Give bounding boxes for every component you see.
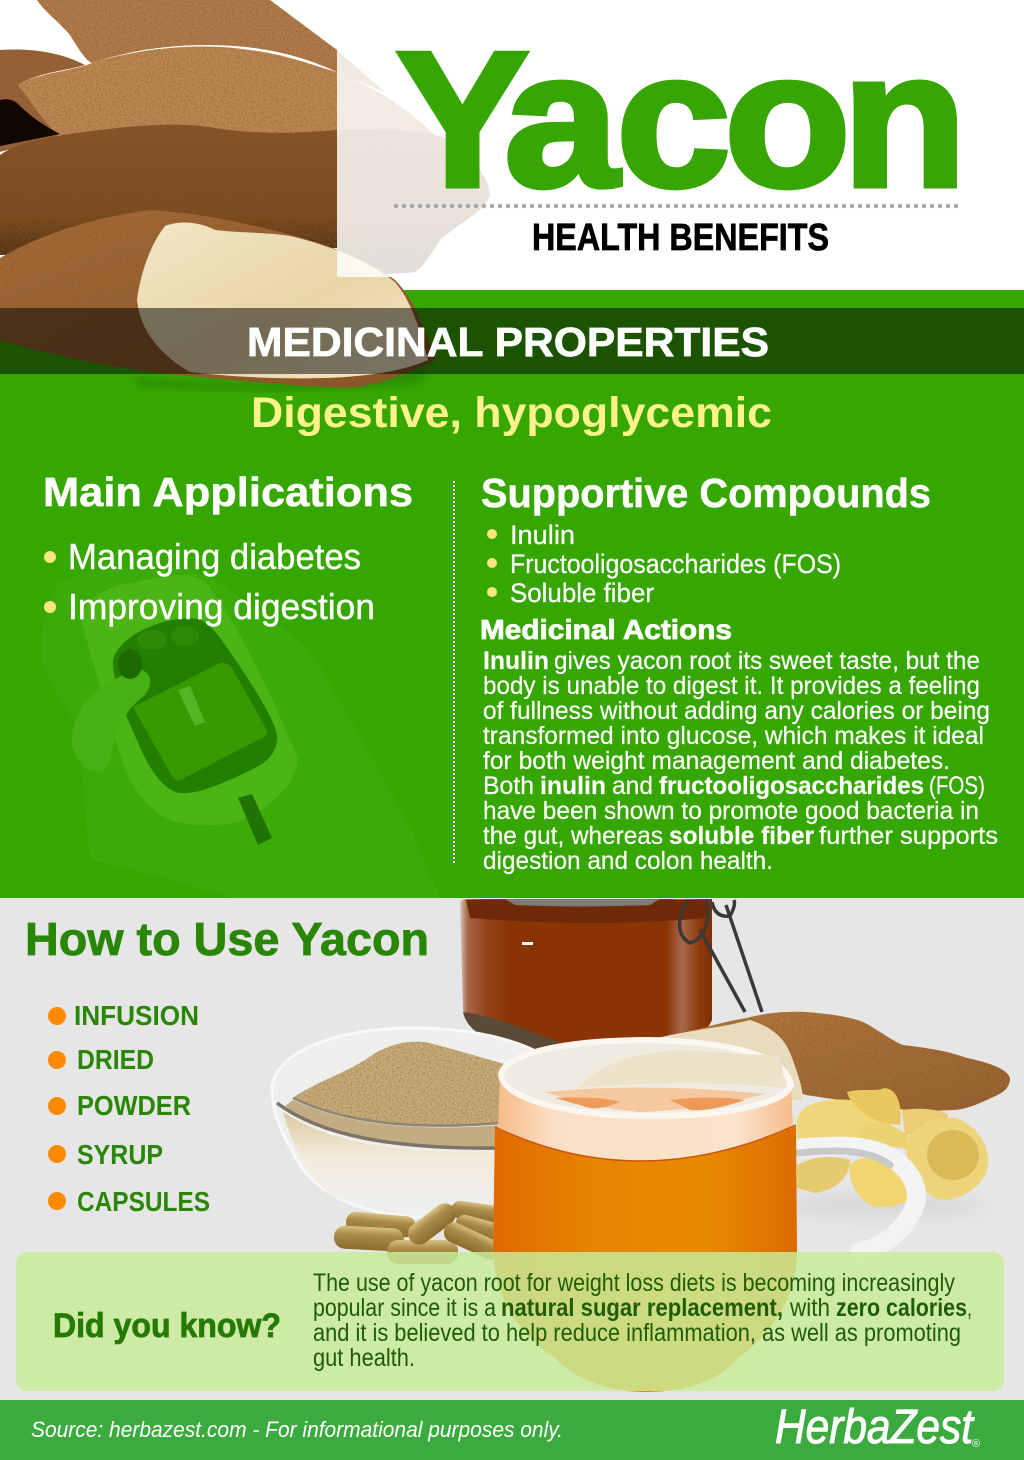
list item: improving digestion: Improving digestion	[68, 586, 375, 627]
list item: fructooligosaccharides: Fructooligosaccharides (FOS)	[510, 549, 841, 579]
panel: main applications	[43, 469, 413, 627]
text block: did you know body: ,	[967, 1294, 972, 1322]
white strip beside root above green band	[400, 277, 1024, 290]
text block: did you know body: gut health.	[313, 1344, 415, 1372]
text block: did you know body: with	[789, 1294, 830, 1322]
panel: supportive compounds	[480, 470, 998, 875]
logo: HerbaZest: HerbaZest	[775, 1401, 974, 1454]
list item: dried: DRIED	[77, 1044, 154, 1075]
subtitle: health benefits: HEALTH BENEFITS	[532, 217, 829, 259]
callout: did you know box	[16, 1252, 1004, 1391]
white translucent title panel	[337, 0, 1024, 277]
text block: medicinal actions body: have been shown to promote good bacteria in	[483, 797, 979, 825]
surface line	[495, 1125, 796, 1161]
source note: Source: herbazest.com - For informational purposes only.	[31, 1417, 563, 1442]
text block: medicinal actions body: transformed into glucose, which makes it ideal	[483, 722, 984, 750]
photo: yacon roots in header	[0, 0, 490, 391]
text block: medicinal actions body: Inulin	[483, 647, 549, 675]
heading: medicinal actions: Medicinal Actions	[480, 614, 732, 645]
list: ways to use yacon	[48, 1000, 210, 1217]
dotted column divider	[453, 482, 455, 865]
text block: did you know body: popular since it is a	[313, 1294, 496, 1322]
heading: supportive compounds: Supportive Compounds	[481, 470, 931, 516]
list item: capsules: CAPSULES	[77, 1186, 210, 1217]
cup body	[493, 1075, 797, 1392]
heading: did you know: Did you know?	[53, 1307, 281, 1345]
list item: soluble fiber: Soluble fiber	[510, 578, 654, 608]
title: Yacon: o	[724, 11, 851, 227]
photo: glass bowl of yacon powder	[272, 1028, 572, 1217]
title: Yacon: Y	[396, 11, 529, 227]
list item: syrup	[48, 1139, 163, 1170]
text block: medicinal actions body: fructooligosaccharides	[659, 772, 924, 800]
list item: powder: POWDER	[77, 1090, 191, 1121]
photo: whole yacon root	[600, 1012, 1010, 1111]
list item: syrup: SYRUP	[77, 1139, 163, 1170]
logo: HerbaZest: ®	[972, 1438, 980, 1450]
tea liquid	[493, 1126, 797, 1392]
text block: medicinal actions body: digestion and colon health.	[483, 847, 773, 875]
text block: medicinal actions body: for both weight management and diabetes.	[483, 747, 950, 775]
cup handle	[798, 1146, 917, 1252]
title: Yacon: c	[616, 11, 731, 227]
text block: medicinal actions body: inulin	[540, 772, 606, 800]
dotted divider under title	[396, 204, 958, 208]
title: Yacon: a	[504, 11, 621, 227]
heading: medicinal properties: MEDICINAL PROPERTIES	[247, 319, 769, 365]
list item: dried	[48, 1044, 154, 1075]
text block: medicinal actions body: (FOS)	[929, 772, 985, 800]
photo: glass cup of yacon tea	[493, 1040, 917, 1392]
text block: medicinal actions body: further supports	[819, 822, 998, 850]
text block: did you know body	[313, 1269, 972, 1372]
text block: medicinal actions body: of fullness without adding any calories or being	[483, 697, 990, 725]
cup interior and rim	[501, 1040, 791, 1116]
heading: main applications: Main Applications	[43, 469, 413, 515]
dark band behind medicinal properties heading	[0, 308, 1024, 374]
text block: did you know body: zero calories	[836, 1294, 967, 1322]
text block: medicinal actions body: gives yacon root its sweet taste, but the	[554, 647, 980, 675]
text block: medicinal actions body: the gut, whereas	[483, 822, 663, 850]
photo: hand holding glucose meter, green tint	[41, 567, 440, 898]
text block: did you know body: natural sugar replacement,	[501, 1294, 783, 1322]
list item: managing diabetes: Managing diabetes	[68, 536, 361, 577]
list item: infusion: INFUSION	[74, 1000, 199, 1031]
title: Yacon: n	[842, 11, 967, 227]
photo: capsules	[333, 1199, 506, 1264]
photo: dried yacon slices	[785, 1088, 988, 1218]
text block: medicinal actions body: soluble fiber	[669, 822, 814, 850]
subheading: digestive, hypoglycemic: Digestive, hypoglycemic	[251, 389, 772, 437]
text block: medicinal actions body: Both	[483, 772, 534, 800]
heading: how to use yacon: How to Use Yacon	[25, 913, 429, 965]
text block: medicinal actions body	[483, 647, 998, 875]
text block: medicinal actions body: body is unable to digest it. It provides a feeling	[483, 672, 980, 700]
footer	[0, 1400, 1024, 1460]
list item: inulin: Inulin	[510, 520, 575, 550]
photo: yacon syrup jar	[460, 899, 762, 1052]
text block: medicinal actions body: and	[612, 772, 653, 800]
